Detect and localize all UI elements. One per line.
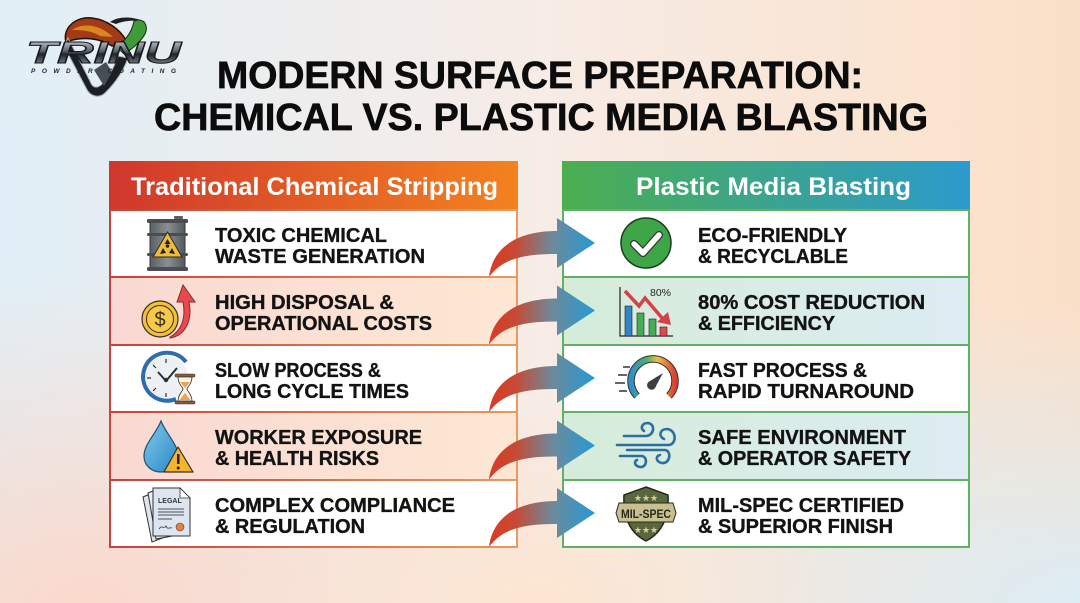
title: CHEMICAL VS. PLASTIC MEDIA BLASTING [154, 97, 928, 139]
title: MODERN SURFACE PREPARATION: [217, 55, 863, 97]
icon: mil-spec shield: ★★★ [634, 493, 658, 503]
text: worker exposure and health risks: WORKER EXPOSURE [215, 427, 422, 449]
icon: falling cost chart [620, 287, 673, 336]
text: high disposal and operational costs: OPERATIONAL COSTS [215, 313, 432, 335]
arrow: row 1 [489, 218, 595, 277]
icon: mil-spec shield: MIL-SPEC [621, 507, 671, 521]
text: slow process and long cycle times: LONG CYCLE TIMES [215, 381, 409, 403]
arrow: row 2 [489, 286, 595, 344]
icon: water drop with warning [144, 421, 193, 472]
text: complex compliance and regulation: COMPLEX COMPLIANCE [215, 495, 455, 517]
rows background: plastic [563, 210, 969, 547]
text: safe environment and operator safety [698, 427, 912, 470]
icon: green check [621, 218, 671, 268]
text: worker exposure and health risks: & HEALTH RISKS [215, 448, 379, 470]
text: slow process and long cycle times [215, 360, 409, 403]
icon: legal documents: LEGAL [158, 498, 182, 505]
text: toxic chemical waste generation [215, 225, 425, 268]
text: eco-friendly and recyclable: & RECYCLABLE [698, 246, 848, 268]
title [154, 55, 928, 139]
arrow: row 5 [489, 488, 595, 547]
icon: mil-spec shield [616, 487, 676, 541]
text: fast process and rapid turnaround: FAST PROCESS & [698, 360, 867, 382]
logo: Trinu Powder Coating: TRINU [26, 35, 184, 70]
text: toxic chemical waste generation: WASTE GENERATION [215, 246, 425, 268]
text: 80% cost reduction and efficiency: & EFFICIENCY [698, 313, 836, 335]
icon: wind [617, 423, 675, 467]
text: eco-friendly and recyclable: ECO-FRIENDLY [698, 225, 848, 247]
icon: mil-spec shield: ★★★ [634, 525, 658, 535]
text: slow process and long cycle times: SLOW PROCESS & [215, 360, 381, 382]
text: mil-spec certified and superior finish [698, 495, 904, 538]
text: complex compliance and regulation: & REGULATION [215, 516, 365, 538]
panel header: plastic: Plastic Media Blasting [636, 173, 911, 201]
text: high disposal and operational costs: HIGH DISPOSAL & [215, 292, 394, 314]
panel header: traditional [109, 161, 518, 211]
icon: coin with rising arrow [142, 285, 195, 338]
panel header: plastic [562, 161, 970, 211]
icon: speed gauge [615, 359, 675, 396]
rows background: traditional [110, 210, 517, 547]
panel: Plastic Media Blasting [562, 161, 970, 547]
text: eco-friendly and recyclable [698, 225, 848, 268]
text: 80% cost reduction and efficiency [698, 292, 925, 335]
text: fast process and rapid turnaround: RAPID TURNAROUND [698, 381, 914, 403]
text: worker exposure and health risks [215, 427, 422, 470]
arrow: row 4 [489, 420, 595, 480]
icon: coin with rising arrow: $ [154, 309, 166, 331]
icon: legal documents [143, 488, 190, 542]
icon: falling cost chart: 80% [650, 287, 671, 299]
text: complex compliance and regulation [215, 495, 455, 538]
text: high disposal and operational costs [215, 292, 432, 335]
panel: Traditional Chemical Stripping [109, 161, 518, 547]
panel header: traditional: Traditional Chemical Stripping [131, 173, 498, 201]
text: safe environment and operator safety: & OPERATOR SAFETY [698, 448, 912, 470]
text: mil-spec certified and superior finish: & SUPERIOR FINISH [698, 516, 893, 538]
arrow: row 3 [489, 353, 595, 412]
logo: Trinu Powder Coating: POWDER COATING [31, 68, 176, 75]
text: safe environment and operator safety: SAFE ENVIRONMENT [698, 427, 906, 449]
text: toxic chemical waste generation: TOXIC CHEMICAL [215, 225, 387, 247]
icon: toxic waste barrel [147, 216, 188, 271]
text: 80% cost reduction and efficiency: 80% COST REDUCTION [698, 292, 925, 314]
logo: Trinu Powder Coating [26, 17, 184, 96]
text: fast process and rapid turnaround [698, 360, 914, 403]
icon: clock and hourglass [143, 353, 195, 404]
text: mil-spec certified and superior finish: MIL-SPEC CERTIFIED [698, 495, 904, 517]
